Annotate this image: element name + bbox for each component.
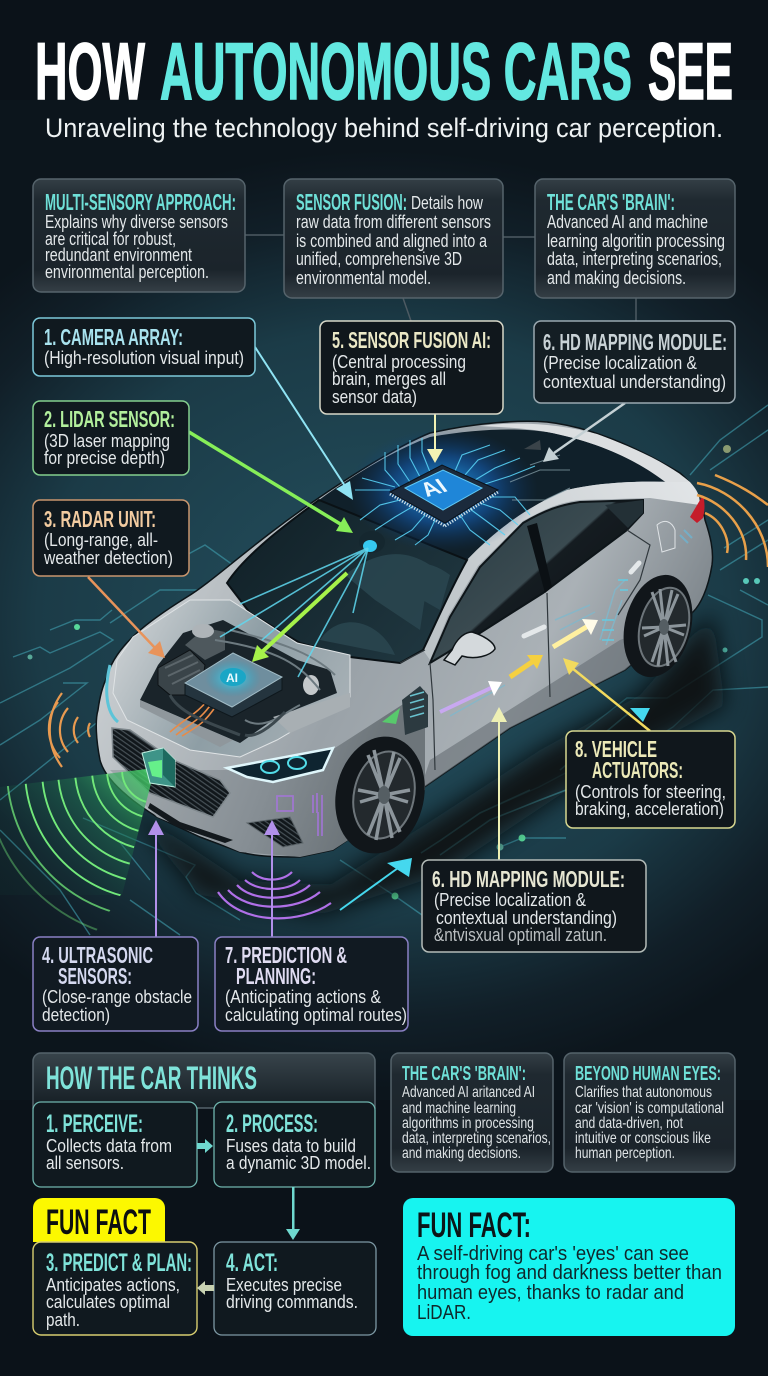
side DRL bbox=[107, 665, 118, 722]
panel: beyond human eyes: and data-driven, not bbox=[575, 1115, 683, 1132]
panel: sensor fusion bbox=[284, 179, 503, 298]
callout: camera array: 1. CAMERA ARRAY: bbox=[44, 324, 183, 350]
front grille bbox=[112, 728, 230, 817]
ultrasonic waves bbox=[218, 872, 331, 918]
side silver rail bbox=[423, 482, 700, 660]
panel: sensor fusion: Details how bbox=[411, 193, 484, 213]
arrow: cyan lower bbox=[340, 858, 412, 910]
callout: HD mapping module lower: 6. HD MAPPING MODULE: bbox=[432, 866, 625, 892]
panel: sensor fusion: unified, comprehensive 3D bbox=[296, 249, 462, 269]
callout: prediction and planning: 7. PREDICTION & bbox=[225, 942, 347, 968]
lidar sensing wedge bbox=[0, 768, 155, 895]
callout: radar unit: 3. RADAR UNIT: bbox=[44, 506, 156, 532]
engine parts bbox=[140, 624, 350, 747]
panel: beyond human eyes: car 'vision' is computational bbox=[575, 1100, 724, 1117]
callout: sensor fusion AI bbox=[320, 321, 503, 414]
seats in cabin bbox=[320, 554, 450, 655]
panel: the car's brain: Advanced AI and machine bbox=[547, 212, 708, 232]
panel: the car's brain lower: THE CAR'S 'BRAIN': bbox=[402, 1063, 526, 1085]
arrow: HD mapping lower bbox=[491, 707, 507, 860]
panel: the car's brain: and making decisions. bbox=[547, 268, 686, 288]
radar waves: rear right bbox=[697, 475, 768, 567]
panel: sensor fusion: raw data from different sensors bbox=[296, 212, 491, 232]
arrow: data flow purple bbox=[440, 681, 502, 712]
tail light bbox=[690, 495, 704, 523]
panel: the car's brain: learning algoritin processing bbox=[547, 231, 725, 251]
panel: multi-sensory approach: are critical for robust, bbox=[45, 229, 176, 249]
callout: prediction and planning: PLANNING: bbox=[236, 963, 316, 989]
step: predict and plan bbox=[33, 1242, 197, 1335]
panel: fun fact cyan: human eyes, thanks to radar and bbox=[417, 1281, 684, 1304]
title: HOW bbox=[35, 27, 145, 117]
panel: the car's brain: THE CAR'S 'BRAIN': bbox=[547, 189, 675, 215]
headlight bbox=[227, 748, 333, 782]
holographic door circuits bbox=[440, 530, 692, 716]
transparent hood bbox=[113, 600, 350, 757]
callout: lidar sensor: 2. LIDAR SENSOR: bbox=[44, 406, 175, 432]
callout: sensor fusion AI: sensor data) bbox=[332, 387, 417, 407]
front sensor glyphs bbox=[277, 793, 322, 836]
panel: the car's brain lower: and making decisions. bbox=[402, 1145, 521, 1162]
front sensor unit bbox=[142, 748, 175, 787]
step: process: a dynamic 3D model. bbox=[226, 1153, 371, 1173]
panel: fun fact cyan: through fog and darkness better than bbox=[417, 1261, 722, 1284]
panel: multi-sensory approach: environmental perception. bbox=[45, 262, 209, 282]
callout: sensor fusion AI: (Central processing bbox=[332, 352, 466, 372]
tag: fun fact yellow: FUN FACT bbox=[46, 1203, 151, 1242]
step: act: driving commands. bbox=[226, 1292, 358, 1312]
roof AI chip: AI bbox=[414, 474, 452, 501]
step: act bbox=[214, 1242, 376, 1335]
arrow: sensor fusion AI bbox=[427, 414, 443, 463]
callout: prediction and planning: calculating optimal routes) bbox=[225, 1005, 407, 1025]
door handles bbox=[524, 563, 639, 636]
step: process: 2. PROCESS: bbox=[226, 1110, 318, 1138]
step: process bbox=[214, 1102, 375, 1187]
roof AI chip bbox=[348, 428, 570, 552]
step: process: Fuses data to build bbox=[226, 1136, 356, 1156]
panel: sensor fusion: SENSOR FUSION: bbox=[296, 189, 407, 215]
callout: HD mapping module lower: contextual understanding) bbox=[436, 908, 617, 928]
heading: how the car thinks: HOW THE CAR THINKS bbox=[46, 1060, 257, 1096]
step: perceive: all sensors. bbox=[46, 1153, 124, 1173]
camera lens bbox=[359, 531, 385, 553]
panel: how the car thinks bbox=[33, 1053, 375, 1108]
panel: the car's brain lower: data, interpreting scenarios, bbox=[402, 1130, 551, 1147]
radar waves: front left bbox=[49, 693, 90, 767]
callout: HD mapping module lower: (Precise localization & bbox=[434, 890, 586, 910]
headlight lenses bbox=[261, 757, 306, 773]
panel: fun fact cyan bbox=[403, 1198, 735, 1336]
rear wheel bbox=[613, 568, 703, 684]
callout: radar unit: weather detection) bbox=[43, 548, 173, 568]
background circuit traces bbox=[0, 405, 768, 935]
callout: sensor fusion AI: brain, merges all bbox=[332, 369, 446, 389]
callout: lidar sensor bbox=[33, 401, 189, 475]
step: predict and plan: path. bbox=[46, 1310, 80, 1330]
callout: camera array bbox=[33, 318, 255, 376]
callout: vehicle actuators: braking, acceleration) bbox=[575, 799, 724, 819]
lower front bumper shading bbox=[110, 690, 425, 857]
arrow: HD mapping top bbox=[543, 403, 625, 462]
green sensor arcs bbox=[0, 772, 146, 930]
engine AI module bbox=[185, 653, 282, 717]
step: predict and plan: 3. PREDICT & PLAN: bbox=[46, 1249, 192, 1277]
callout: lidar sensor: (3D laser mapping bbox=[44, 431, 170, 451]
step: predict and plan: Anticipates actions, bbox=[46, 1275, 180, 1295]
callout: HD mapping module lower bbox=[422, 860, 646, 952]
panel: the car's brain lower: and machine learning bbox=[402, 1100, 516, 1117]
roof rail highlight bbox=[480, 424, 690, 484]
step: perceive: Collects data from bbox=[46, 1136, 172, 1156]
tag: fun fact yellow bbox=[33, 1198, 165, 1242]
callout: prediction and planning: (Anticipating actions & bbox=[225, 987, 381, 1007]
roof glass bbox=[319, 429, 667, 560]
callout: camera array: (High-resolution visual input) bbox=[44, 348, 244, 368]
callout: ultrasonic sensors bbox=[33, 937, 198, 1031]
camera beams bbox=[220, 548, 368, 677]
callout: ultrasonic sensors: (Close-range obstacle bbox=[42, 987, 192, 1007]
window pillar bbox=[527, 523, 552, 593]
panel: beyond human eyes: intuitive or conscious like bbox=[575, 1130, 711, 1147]
panel: multi-sensory approach: MULTI-SENSORY APPROACH: bbox=[45, 189, 236, 215]
step: act: 4. ACT: bbox=[226, 1249, 278, 1277]
panel: the car's brain bbox=[535, 179, 735, 298]
arrow: act to predict bbox=[197, 1281, 214, 1295]
panel: the car's brain lower bbox=[391, 1053, 553, 1172]
panel: multi-sensory approach: Explains why diverse sensors bbox=[45, 212, 228, 232]
callout: ultrasonic sensors: detection) bbox=[42, 1005, 110, 1025]
engine AI module: AI bbox=[226, 671, 238, 685]
arrow: actuators bbox=[563, 658, 650, 731]
panel: fun fact cyan: A self-driving car's 'eyes' can see bbox=[417, 1242, 689, 1265]
panel: beyond human eyes: Clarifies that autonomous bbox=[575, 1084, 712, 1101]
callout: vehicle actuators: (Controls for steering, bbox=[575, 782, 726, 802]
arrow: perceive to process bbox=[197, 1139, 213, 1153]
door seams bbox=[400, 530, 650, 770]
lower intake bbox=[148, 803, 233, 843]
panel: the car's brain: data, interpreting scenarios, bbox=[547, 249, 722, 269]
arrow: data flow white bbox=[553, 619, 598, 647]
arrow: process to act bbox=[286, 1187, 300, 1240]
connector lines between top panels bbox=[245, 235, 636, 321]
callout: vehicle actuators bbox=[566, 731, 735, 828]
fuel door bbox=[657, 521, 675, 552]
step: perceive: 1. PERCEIVE: bbox=[46, 1110, 143, 1138]
arrow: lidar bbox=[189, 432, 353, 533]
panel: fun fact cyan: FUN FACT: bbox=[417, 1206, 531, 1245]
panel: beyond human eyes bbox=[564, 1053, 735, 1172]
panel: multi-sensory approach bbox=[33, 179, 245, 292]
step: perceive bbox=[33, 1102, 197, 1187]
arrow: prediction bbox=[264, 820, 280, 937]
arrow: cyan upper bbox=[630, 708, 650, 722]
rear quarter glass bbox=[605, 500, 643, 528]
callout: sensor fusion AI: 5. SENSOR FUSION AI: bbox=[332, 327, 491, 353]
side windows bbox=[430, 500, 643, 663]
car bbox=[96, 421, 725, 915]
panel: beyond human eyes: human perception. bbox=[575, 1145, 675, 1162]
callout: HD mapping module lower: &ntvisxual optimall zatun. bbox=[434, 925, 607, 945]
callout: radar unit bbox=[33, 500, 189, 576]
fog lamp bbox=[247, 817, 303, 847]
subtitle: Unraveling the technology behind self-driving car perception. bbox=[45, 113, 723, 143]
callout: prediction and planning bbox=[215, 937, 408, 1031]
arrow: data flow yellow bbox=[510, 655, 543, 677]
callout: radar unit: (Long-range, all- bbox=[44, 530, 158, 550]
callout: lidar sensor: for precise depth) bbox=[44, 448, 165, 468]
callout: vehicle actuators: 8. VEHICLE bbox=[575, 736, 657, 762]
panel: sensor fusion: environmental model. bbox=[296, 268, 431, 288]
panel: fun fact cyan: LiDAR. bbox=[417, 1301, 471, 1324]
callout: vehicle actuators: ACTUATORS: bbox=[592, 757, 683, 783]
callout: HD mapping module top bbox=[534, 321, 735, 403]
engine bay bbox=[140, 620, 337, 743]
callout: ultrasonic sensors: 4. ULTRASONIC bbox=[42, 942, 153, 968]
callout: HD mapping module top: contextual understanding) bbox=[543, 372, 726, 392]
arrow: camera to engine module bbox=[252, 573, 347, 662]
arrow: ultrasonic bbox=[148, 820, 164, 937]
door lower shading bbox=[420, 612, 693, 790]
step: predict and plan: calculates optimal bbox=[46, 1292, 170, 1312]
arrow: camera array bbox=[255, 347, 353, 500]
arrow: radar bbox=[88, 577, 165, 658]
fender vent bbox=[382, 686, 428, 735]
car shadow bbox=[120, 612, 725, 915]
panel: the car's brain lower: algorithms in processing bbox=[402, 1115, 534, 1132]
callout: HD mapping module top: (Precise localization & bbox=[543, 353, 697, 373]
roof antenna fin bbox=[524, 440, 541, 450]
panel: the car's brain lower: Advanced AI aritanced AI bbox=[402, 1084, 535, 1101]
callout: ultrasonic sensors: SENSORS: bbox=[58, 963, 132, 989]
panel: sensor fusion: is combined and aligned into a bbox=[296, 231, 488, 251]
step: act: Executes precise bbox=[226, 1275, 342, 1295]
panel: multi-sensory approach: redundant environment bbox=[45, 245, 192, 265]
front wheel bbox=[325, 728, 435, 862]
windshield bbox=[227, 500, 467, 663]
car body bbox=[96, 421, 713, 857]
wing mirror bbox=[444, 632, 495, 665]
